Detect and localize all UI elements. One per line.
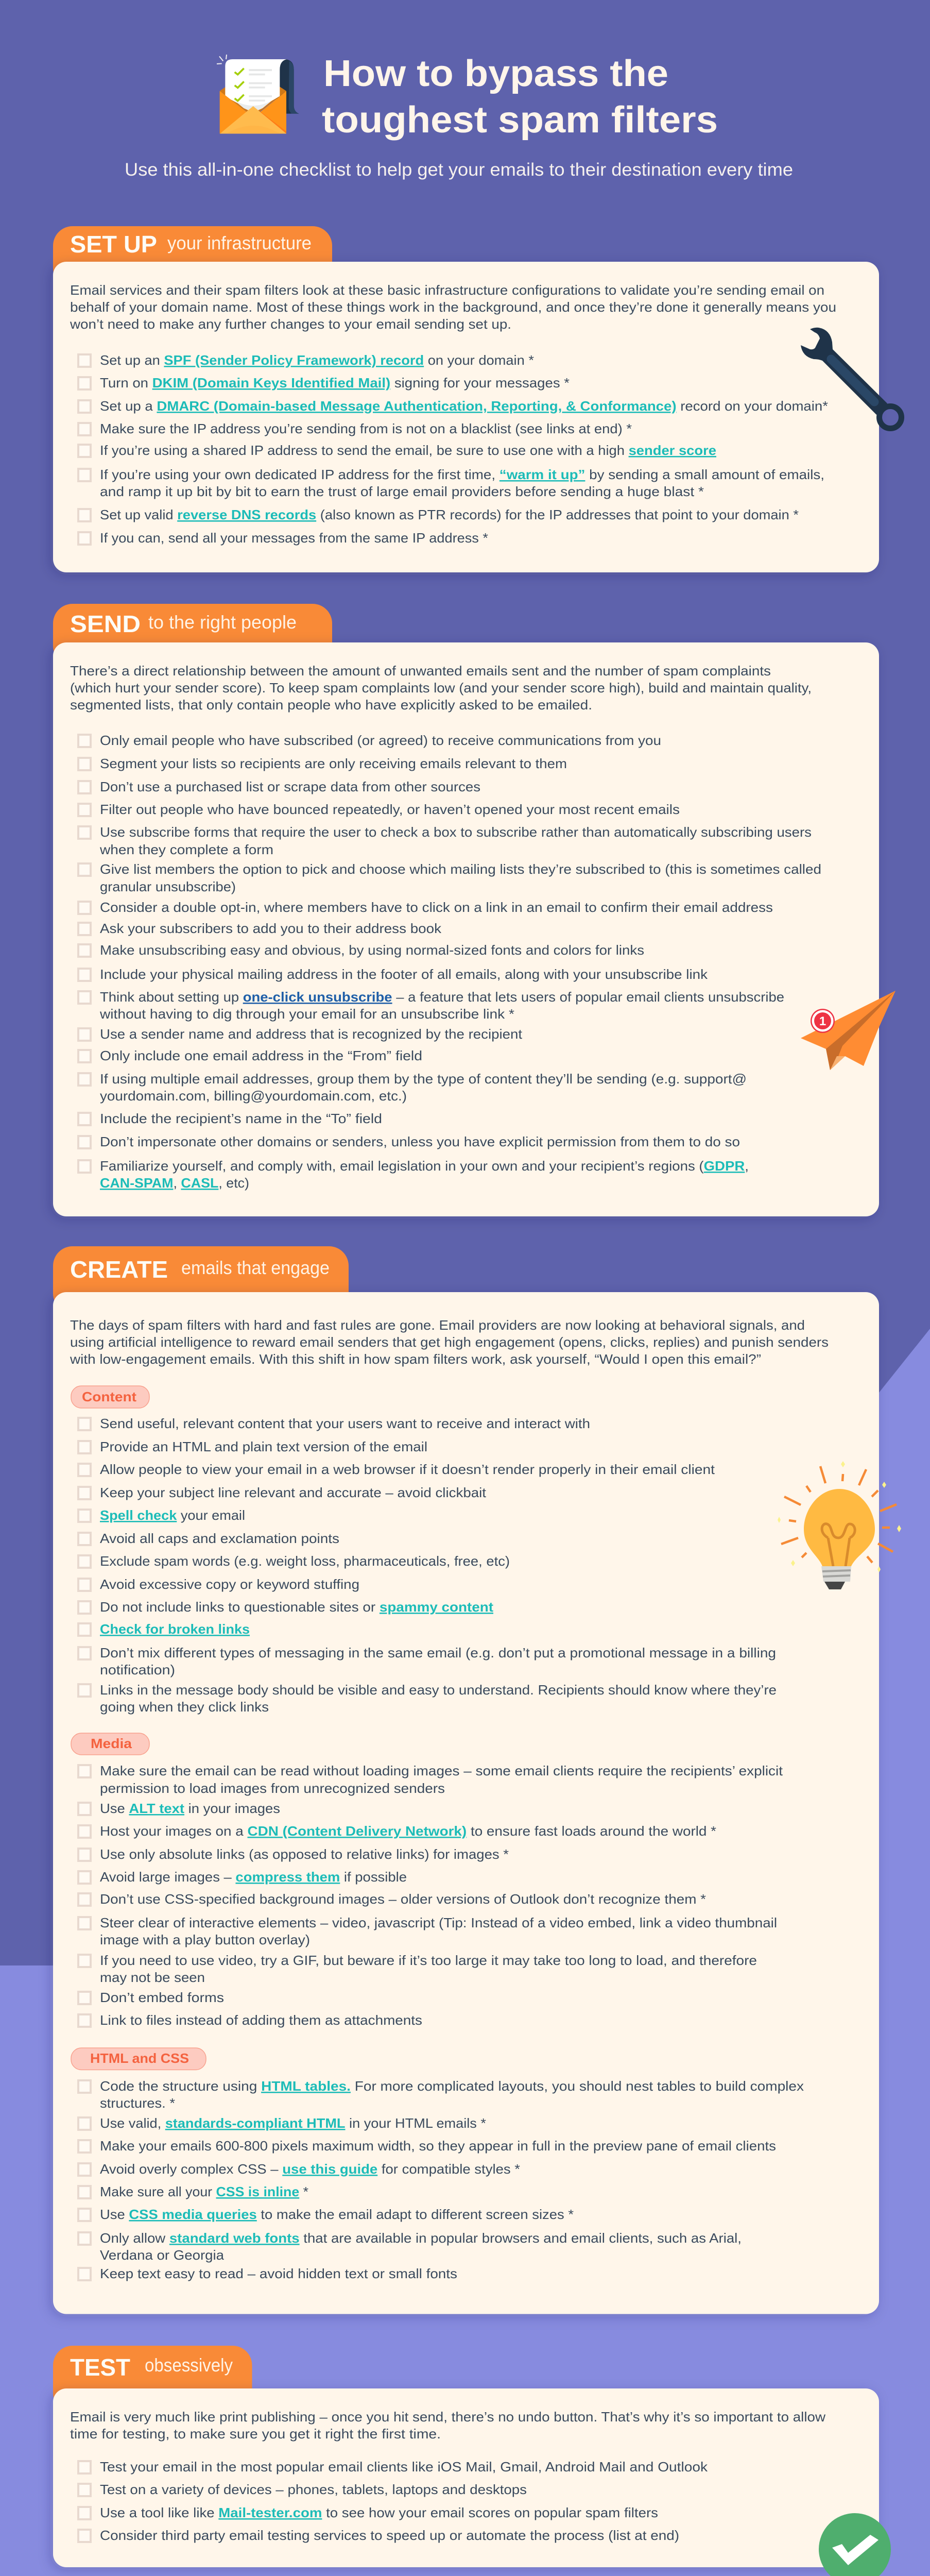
item: Host your images on a CDN (Content Delivery Network) to ensure fast loads around the world * — [100, 1823, 716, 1839]
item: Ask your subscribers to add you to their address book — [100, 921, 442, 936]
panel: test card — [53, 2388, 879, 2567]
tab heading: test: obsessively — [145, 2354, 233, 2376]
checklist — [78, 2459, 708, 2543]
item: when they complete a form — [99, 842, 273, 857]
title: How to bypass the — [323, 53, 668, 94]
item: Include your physical mailing address in the footer of all emails, along with your unsubscribe link — [100, 967, 708, 982]
pill: html and css — [71, 2048, 206, 2070]
item: Consider third party email testing services to speed up or automate the process (list at end) — [100, 2528, 679, 2543]
item: Only email people who have subscribed (or agreed) to receive communications from you — [100, 733, 661, 748]
item — [78, 1953, 757, 1985]
item: Consider a double opt-in, where members have to click on a link in an email to confirm their email address — [100, 900, 773, 915]
icon: paper airplane with notification badge — [801, 991, 895, 1070]
item: Keep text easy to read – avoid hidden text or small fonts — [100, 2266, 457, 2281]
intro text: Email services and their spam filters look at these basic infrastructure configurations to validate you’re sending email on — [70, 282, 824, 298]
item: Verdana or Georgia — [100, 2247, 225, 2263]
tab heading: set up — [53, 226, 332, 288]
item: Use subscribe forms that require the user to check a box to subscribe rather than automatically subscribing users — [100, 824, 812, 840]
item — [78, 467, 824, 499]
item: Turn on DKIM (Domain Keys Identified Mail) signing for your messages * — [100, 375, 570, 391]
item: Make sure the IP address you’re sending from is not on a blacklist (see links at end) * — [100, 421, 632, 436]
intro text: won’t need to make any further changes to your email sending set up. — [70, 316, 511, 332]
item: Don’t embed forms — [100, 1990, 224, 2005]
item: Think about setting up one-click unsubscribe – a feature that lets users of popular email clients unsubscribe — [100, 989, 784, 1005]
intro text — [70, 2409, 825, 2442]
subtitle: Use this all-in-one checklist to help get your emails to their destination every time — [125, 160, 793, 180]
item: Avoid all caps and exclamation points — [100, 1531, 339, 1546]
title — [322, 53, 718, 141]
icon: paper airplane with notification badge: 1 — [819, 1014, 826, 1028]
item: Filter out people who have bounced repeatedly, or haven’t opened your most recent emails — [100, 802, 680, 817]
icon: lightbulb — [778, 1461, 901, 1589]
tab heading: create — [53, 1246, 349, 1313]
item: permission to load images from unrecognized senders — [100, 1781, 445, 1796]
item: Use CSS media queries to make the email adapt to different screen sizes * — [100, 2207, 574, 2222]
item: Make unsubscribing easy and obvious, by using normal-sized fonts and colors for links — [100, 942, 644, 958]
item: Don’t mix different types of messaging in the same email (e.g. don’t put a promotional message in a billing — [100, 1645, 776, 1660]
intro text: using artificial intelligence to reward email senders that get high engagement (opens, clicks, replies) and punish senders — [70, 1334, 829, 1350]
intro text: There’s a direct relationship between the amount of unwanted emails sent and the number of spam complaints — [70, 663, 771, 679]
checklist: media — [78, 1763, 783, 2028]
item: Keep your subject line relevant and accurate – avoid clickbait — [100, 1485, 487, 1500]
item: Do not include links to questionable sites or spammy content — [100, 1599, 493, 1615]
tab heading: send — [53, 604, 332, 666]
item: Use ALT text in your images — [100, 1801, 280, 1816]
item: Avoid overly complex CSS – use this guide for compatible styles * — [100, 2161, 520, 2177]
tab heading: set up: SET UP — [70, 231, 157, 258]
section: set up — [53, 226, 901, 572]
intro text — [70, 1317, 829, 1367]
item: Spell check your email — [100, 1507, 245, 1523]
item: Links in the message body should be visible and easy to understand. Recipients should know where they’re — [100, 1682, 777, 1698]
intro text — [70, 282, 836, 332]
item: If using multiple email addresses, group them by the type of content they’ll be sending (e.g. support@ — [100, 1071, 747, 1087]
item: Code the structure using HTML tables. For more complicated layouts, you should nest tables to build complex — [100, 2078, 804, 2094]
item: Allow people to view your email in a web browser if it doesn’t render properly in their email client — [100, 1462, 715, 1477]
item: Make sure all your CSS is inline * — [100, 2184, 308, 2199]
intro text — [70, 663, 812, 713]
item: Set up a DMARC (Domain-based Message Authentication, Reporting, & Conformance) record on your domain* — [100, 398, 828, 414]
item — [78, 1915, 777, 1947]
icon: wrench — [801, 328, 901, 429]
item: Test your email in the most popular email clients like iOS Mail, Gmail, Android Mail and Outlook — [100, 2459, 708, 2475]
pill: content: Content — [82, 1389, 136, 1404]
item — [78, 1682, 777, 1715]
item — [78, 1763, 783, 1796]
item: Avoid excessive copy or keyword stuffing — [100, 1577, 359, 1592]
item: Don’t use CSS-specified background images – older versions of Outlook don’t recognize them * — [100, 1891, 706, 1907]
intro text: Email is very much like print publishing – once you hit send, there’s no undo button. That’s why it’s so important to allow — [70, 2409, 825, 2425]
tab heading: create: emails that engage — [181, 1257, 330, 1278]
item: Use a tool like like Mail-tester.com to see how your email scores on popular spam filters — [100, 2505, 658, 2520]
item — [78, 1071, 747, 1104]
item: Steer clear of interactive elements – video, javascript (Tip: Instead of a video embed, link a video thumbnail — [100, 1915, 777, 1930]
pill: media: Media — [91, 1736, 132, 1751]
item: CAN-SPAM, CASL, etc) — [100, 1175, 249, 1191]
section: send — [53, 604, 895, 1216]
intro text: segmented lists, that only contain people who have explicitly asked to be emailed. — [70, 697, 592, 713]
item: Use a sender name and address that is recognized by the recipient — [100, 1026, 523, 1042]
item: Only allow standard web fonts that are available in popular browsers and email clients, such as Arial, — [100, 2230, 742, 2246]
tab heading: set up: your infrastructure — [167, 232, 312, 253]
item — [78, 824, 812, 857]
tab heading: send: to the right people — [148, 612, 297, 633]
item — [78, 2230, 742, 2263]
item: If you’re using a shared IP address to send the email, be sure to use one with a high sender score — [100, 443, 716, 458]
item: Use valid, standards-compliant HTML in your HTML emails * — [100, 2115, 486, 2131]
item — [78, 1158, 749, 1191]
intro text: (which hurt your sender score). To keep spam complaints low (and your sender score high), build and maintain quality, — [70, 680, 812, 696]
icon: envelope with checklist — [217, 55, 299, 133]
intro text: The days of spam filters with hard and fast rules are gone. Email providers are now looking at behavioral signals, and — [70, 1317, 805, 1333]
tab heading: test: TEST — [70, 2354, 130, 2381]
panel: set up card — [53, 262, 879, 572]
item: Give list members the option to pick and choose which mailing lists they’re subscribed to (this is sometimes called — [100, 861, 821, 877]
item — [78, 989, 784, 1022]
item: Make sure the email can be read without loading images – some email clients require the recipients’ explicit — [100, 1763, 783, 1778]
item — [78, 2078, 804, 2111]
tab heading: test — [53, 2346, 252, 2413]
item: Send useful, relevant content that your users want to receive and interact with — [100, 1416, 590, 1431]
item — [78, 1645, 776, 1677]
item: without having to dig through your email for an unsubscribe link * — [99, 1006, 514, 1022]
item: and ramp it up bit by bit to earn the trust of large email providers before sending a huge blast * — [100, 484, 704, 499]
section: create — [53, 1246, 901, 2314]
section: test — [53, 2346, 891, 2576]
intro text: time for testing, to make sure you get it right the first time. — [70, 2426, 441, 2442]
item: Provide an HTML and plain text version of the email — [100, 1439, 427, 1454]
checklist: content — [78, 1416, 777, 1715]
item: image with a play button overlay) — [100, 1932, 310, 1947]
title: toughest spam filters — [322, 99, 718, 141]
item: going when they click links — [100, 1699, 269, 1715]
intro text: behalf of your domain name. Most of these things work in the background, and once they’re done it generally means you — [70, 299, 836, 315]
item: If you can, send all your messages from the same IP address * — [100, 530, 488, 546]
item: Avoid large images – compress them if possible — [100, 1869, 407, 1885]
intro text: with low-engagement emails. With this shift in how spam filters work, ask yourself, “Would I open this email?” — [70, 1351, 761, 1367]
item: Check for broken links — [100, 1621, 250, 1637]
item: If you’re using your own dedicated IP address for the first time, “warm it up” by sending a small amount of emails, — [100, 467, 824, 482]
pill: html and css: HTML and CSS — [90, 2050, 189, 2066]
tab heading: send: SEND — [70, 611, 141, 637]
icon: green check — [819, 2513, 891, 2576]
item: Set up an SPF (Sender Policy Framework) record on your domain * — [100, 352, 534, 368]
item: structures. * — [100, 2095, 175, 2111]
item: Only include one email address in the “From” field — [100, 1048, 422, 1063]
item: Test on a variety of devices – phones, tablets, laptops and desktops — [100, 2482, 527, 2497]
checklist — [78, 352, 828, 546]
pill: media — [71, 1733, 149, 1755]
item: granular unsubscribe) — [100, 879, 236, 894]
header — [125, 53, 793, 180]
item: Use only absolute links (as opposed to relative links) for images * — [100, 1846, 509, 1862]
panel: send card — [53, 642, 879, 1216]
background: darker upper area — [0, 0, 930, 1965]
tab heading: create: CREATE — [70, 1256, 168, 1283]
item: Don’t impersonate other domains or senders, unless you have explicit permission from them to do so — [100, 1134, 740, 1149]
item: Set up valid reverse DNS records (also known as PTR records) for the IP addresses that point to your domain * — [100, 507, 799, 522]
item: Don’t use a purchased list or scrape data from other sources — [100, 779, 480, 794]
item: If you need to use video, try a GIF, but beware if it’s too large it may take too long to load, and therefore — [100, 1953, 757, 1968]
panel: create card — [53, 1292, 879, 2314]
item — [78, 861, 821, 894]
checklist: html and css — [78, 2078, 804, 2281]
item: notification) — [100, 1662, 175, 1677]
item: Link to files instead of adding them as attachments — [100, 2012, 422, 2028]
checklist — [78, 733, 821, 1191]
item: Include the recipient’s name in the “To” field — [100, 1111, 382, 1126]
pill: content — [71, 1386, 149, 1408]
item: may not be seen — [100, 1970, 205, 1985]
item: yourdomain.com, billing@yourdomain.com, etc.) — [100, 1088, 407, 1104]
item: Exclude spam words (e.g. weight loss, pharmaceuticals, free, etc) — [100, 1553, 510, 1569]
item: Familiarize yourself, and comply with, email legislation in your own and your recipient’s regions ( GDPR, — [100, 1158, 749, 1174]
item: Segment your lists so recipients are only receiving emails relevant to them — [100, 756, 567, 771]
item: Make your emails 600-800 pixels maximum width, so they appear in full in the preview pane of email clients — [100, 2138, 776, 2154]
